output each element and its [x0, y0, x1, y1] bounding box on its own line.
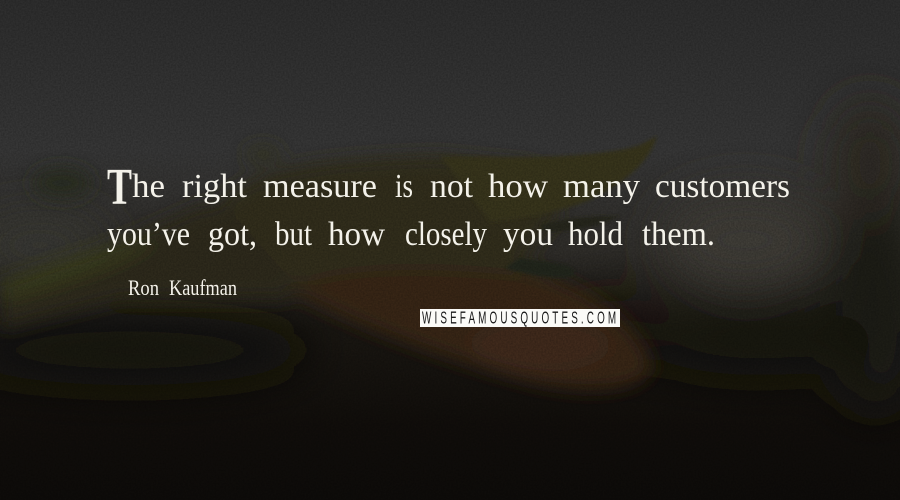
quote line 1: customers: [655, 168, 790, 205]
quote line 2: you’ve: [107, 216, 190, 253]
quote line 1: [107, 159, 790, 216]
quote line 1: is: [395, 168, 413, 205]
quote line 1: many: [563, 168, 640, 205]
watermark badge: [420, 309, 620, 328]
quote line 2: how: [328, 216, 385, 253]
leaf tip: [440, 136, 657, 222]
attribution: Ron Kaufman: Ron: [128, 275, 159, 300]
quote line 2: [107, 216, 715, 253]
quote line 2: but: [275, 216, 312, 253]
quote line 2: got,: [208, 216, 257, 253]
quote line 2: them.: [642, 216, 715, 253]
quote line 2: closely: [405, 216, 487, 253]
quote line 1: he: [132, 168, 165, 205]
quote line 1: T: [107, 159, 132, 216]
quote line 1: not: [430, 168, 474, 205]
attribution: Ron Kaufman: [128, 275, 237, 300]
quote line 2: hold: [568, 216, 623, 253]
quote line 1: measure: [263, 168, 377, 205]
quote text: [107, 159, 790, 253]
quote line 1: right: [182, 168, 248, 205]
quote line 1: how: [488, 168, 548, 205]
quote line 2: you: [503, 216, 553, 253]
watermark text: WISEFAMOUSQUOTES.COM: [422, 309, 616, 328]
attribution: Ron Kaufman: Kaufman: [169, 275, 237, 300]
